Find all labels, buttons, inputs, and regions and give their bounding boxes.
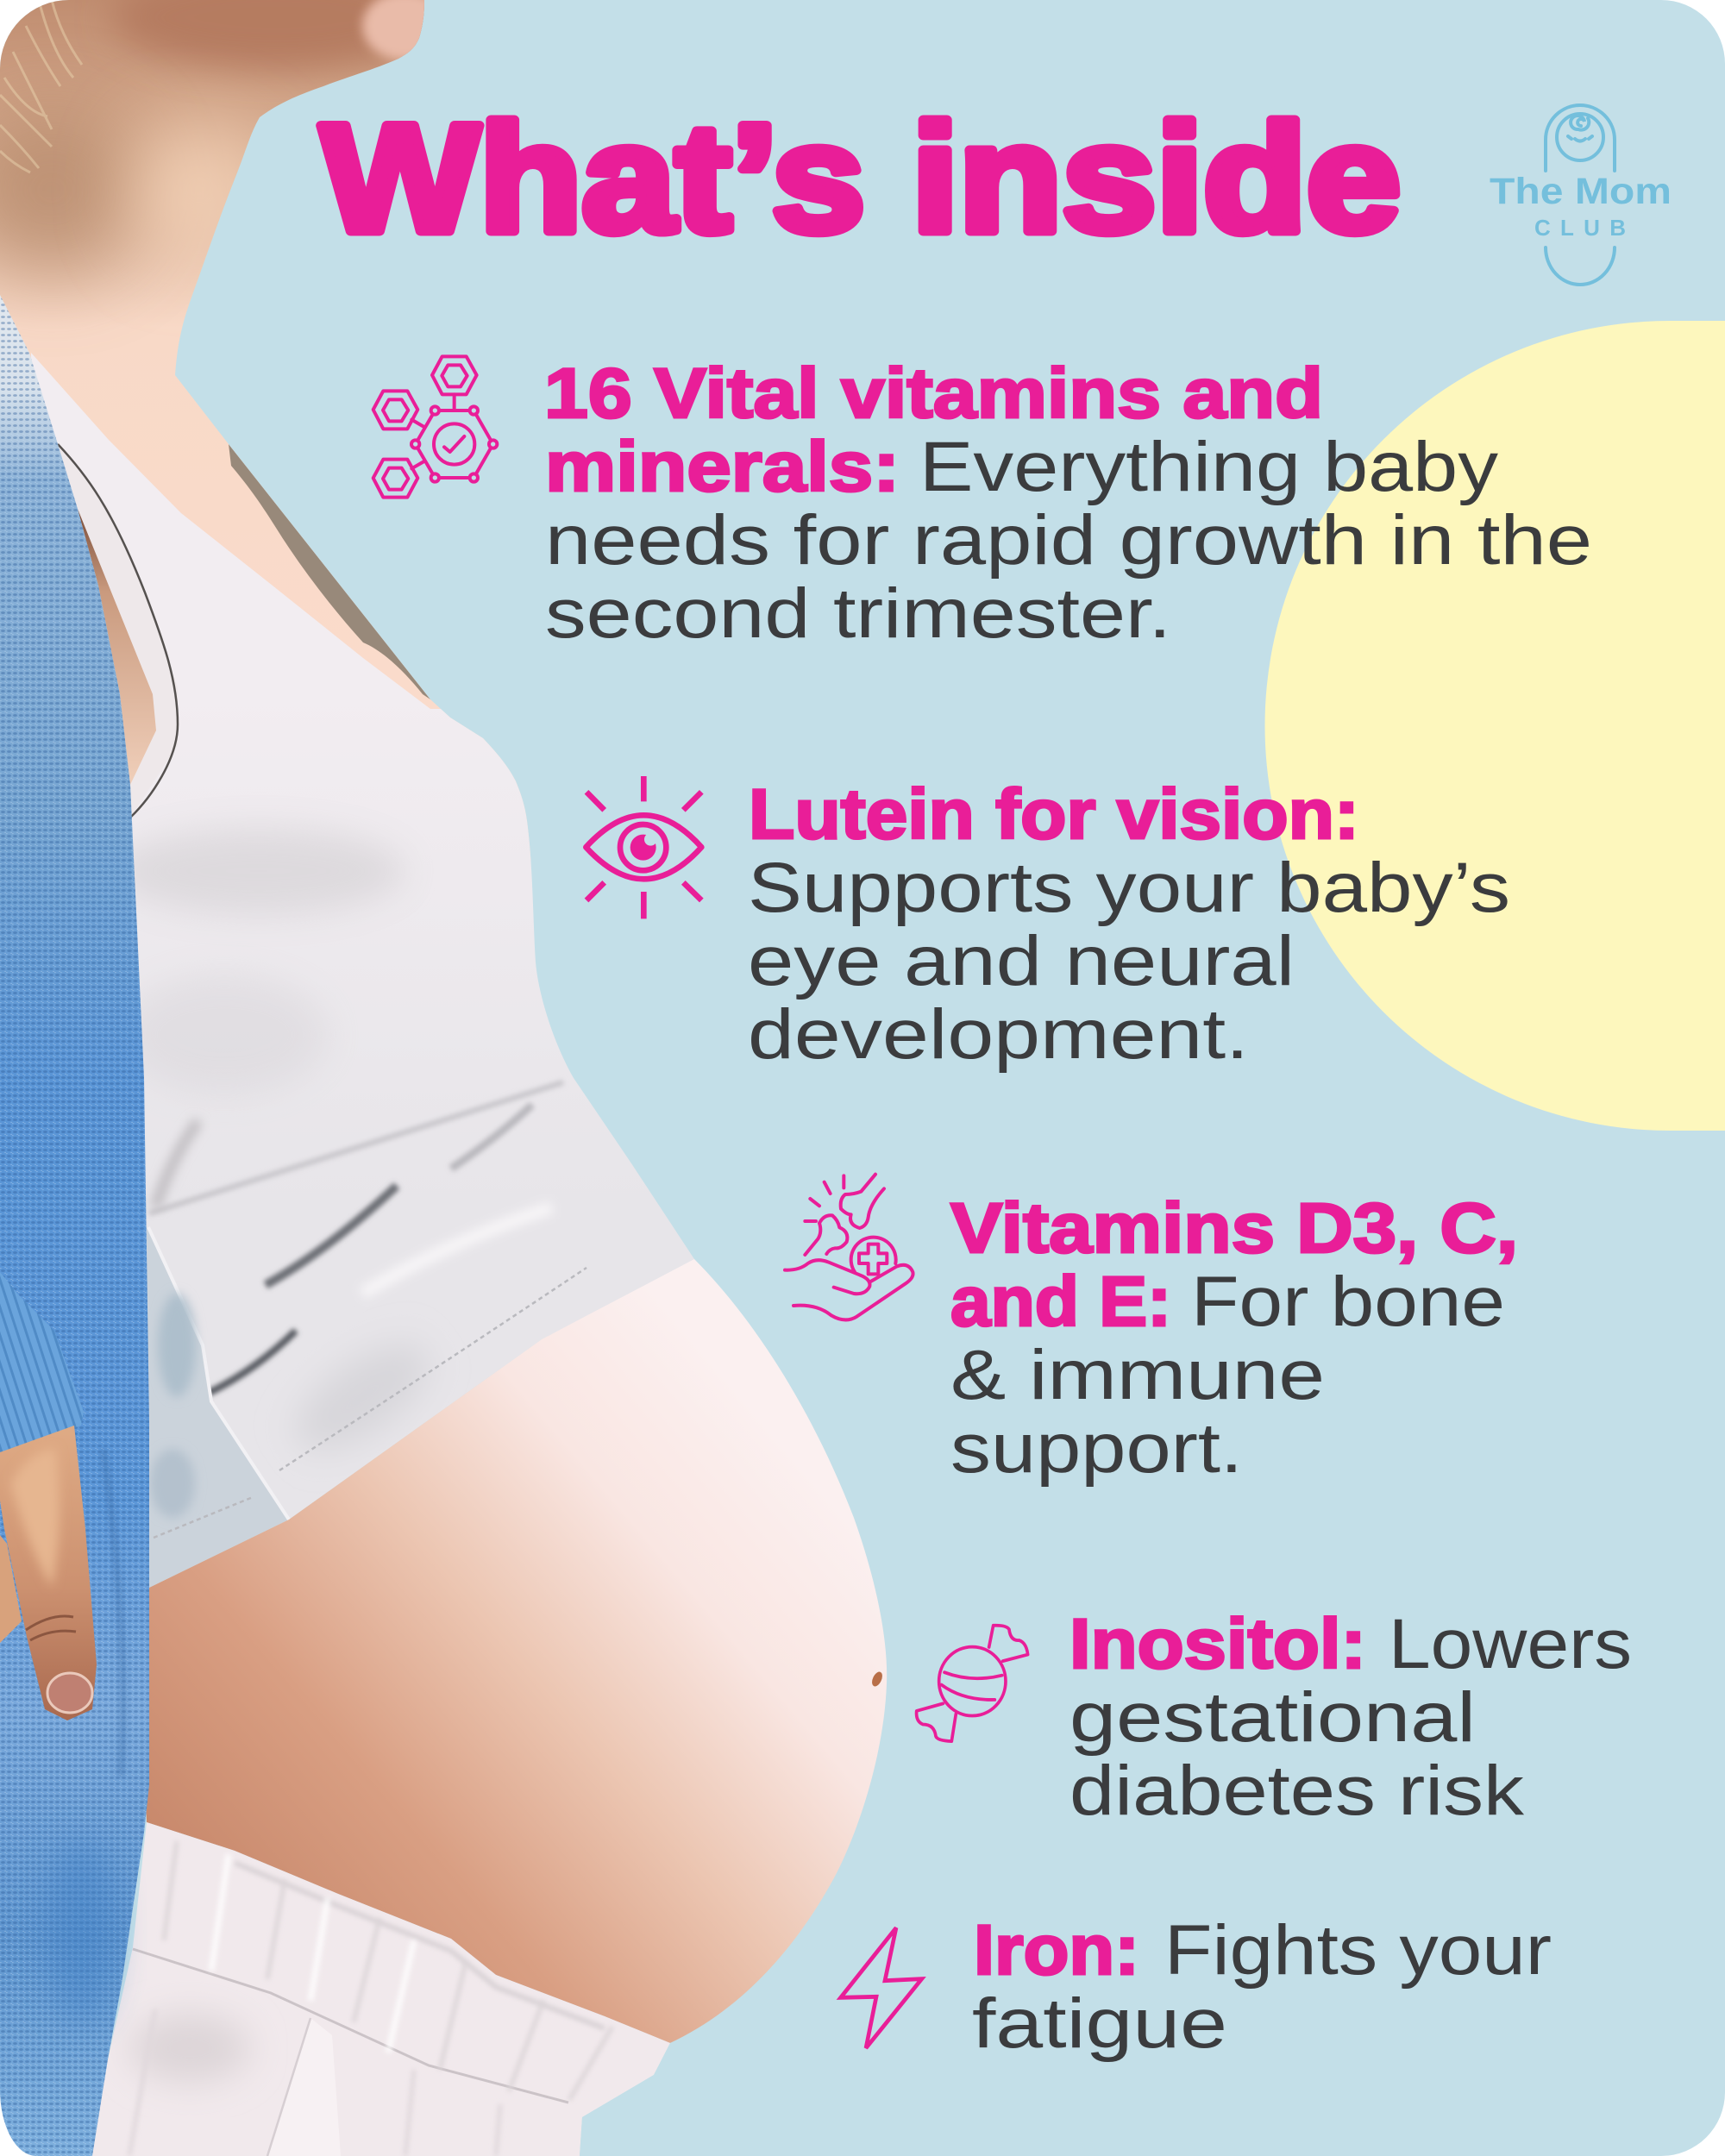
photo: pregnant woman in profile — [0, 0, 892, 2156]
title: What’s — [321, 92, 865, 264]
navel — [872, 1671, 882, 1687]
text: lutein — [748, 775, 1510, 1074]
shirt left gathered panel — [147, 1227, 289, 1588]
pregnant belly — [138, 1259, 892, 2043]
icon: lightning bolt — [841, 1927, 922, 2048]
dark inner garment band — [229, 444, 430, 699]
text: vitamins and minerals — [544, 354, 1592, 653]
shirt waist folds — [149, 1082, 563, 1213]
text: iron: Fights your — [1164, 1911, 1552, 1990]
text: inositol: Lowers — [1389, 1605, 1632, 1683]
logo arch — [1546, 105, 1615, 285]
text: vitamins and minerals: needs for rapid growth in the — [545, 501, 1592, 580]
hand on hip — [0, 1426, 97, 1720]
text: vitamins and minerals: 16 Vital vitamins and — [544, 354, 1323, 433]
hair wisps — [0, 0, 82, 172]
text: iron — [972, 1911, 1552, 2063]
item 5: iron — [841, 1911, 1552, 2063]
icon: eye — [586, 776, 701, 918]
logo club: CLUB — [1534, 215, 1626, 241]
icon: hand holding bones — [785, 1175, 913, 1319]
text: vitamins D3, C and E: For bone — [1191, 1263, 1505, 1341]
text: inositol: diabetes risk — [1070, 1752, 1525, 1830]
pants: linen waistband — [86, 1822, 670, 2156]
icon: candy — [917, 1626, 1028, 1741]
yellow circle accent — [1264, 321, 1725, 1131]
text: inositol — [1070, 1605, 1632, 1830]
text: vitamins and minerals: minerals: — [545, 428, 900, 506]
text: inositol: Inositol: — [1070, 1605, 1366, 1683]
text: lutein: eye and neural — [748, 922, 1295, 1000]
text: vitamins D3, C and E: and E: — [950, 1263, 1171, 1341]
text: iron: Iron: — [974, 1911, 1139, 1990]
shirt: grey tank top — [31, 353, 742, 1590]
cardigan sleeve cuff — [0, 1272, 84, 1452]
text: vitamins D3, C and E — [950, 1189, 1518, 1488]
logo baby face — [1557, 114, 1603, 160]
text: vitamins D3, C and E: support. — [950, 1409, 1243, 1488]
title: inside — [912, 92, 1401, 264]
text: vitamins D3, C and E: & immune — [950, 1336, 1325, 1414]
text: lutein: Lutein for vision: — [749, 775, 1359, 854]
text: vitamins and minerals: second trimester. — [545, 574, 1171, 653]
icon: molecule hexagons — [373, 356, 497, 498]
logo wordmark: The Mom — [1490, 171, 1672, 212]
text: lutein: Supports your baby’s — [748, 849, 1510, 927]
logo: The Mom Club — [1490, 105, 1672, 285]
item 3: vitamins D3, C and E — [785, 1175, 1518, 1488]
text: lutein: development. — [748, 995, 1249, 1074]
title — [321, 92, 1401, 264]
text: vitamins and minerals: Everything baby — [919, 428, 1498, 506]
blue cardigan — [0, 295, 149, 2156]
item 4: inositol — [917, 1605, 1632, 1830]
thumb nail — [47, 1673, 92, 1713]
item 1: vitamins and minerals — [373, 354, 1592, 653]
item 2: lutein — [586, 775, 1510, 1074]
shirt hem stitching — [154, 1268, 586, 1538]
neck and chest skin — [0, 0, 531, 861]
text: inositol: gestational — [1070, 1678, 1476, 1757]
text: iron: fatigue — [972, 1984, 1227, 2063]
text: vitamins D3, C and E: Vitamins D3, C, — [950, 1189, 1518, 1268]
armhole with dark seam — [58, 444, 178, 818]
